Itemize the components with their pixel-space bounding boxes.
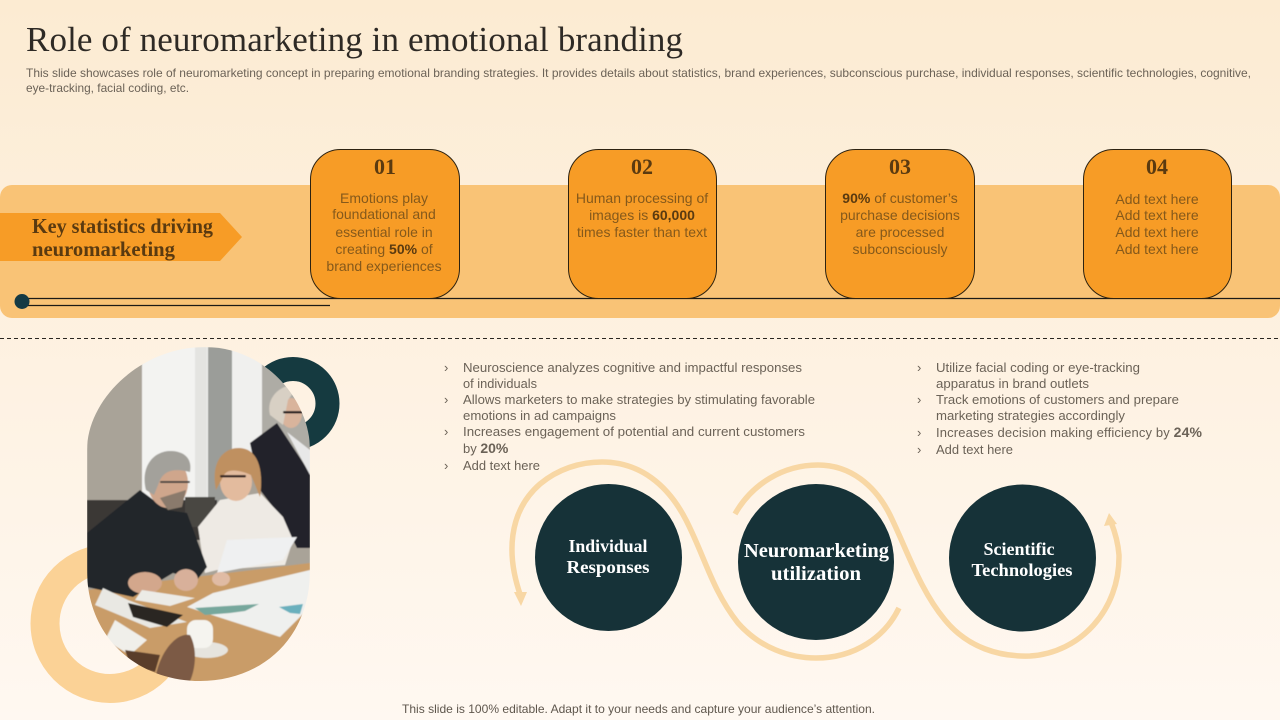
bullet list: scientific technologies: Add text here — [936, 442, 1013, 457]
bullet list: individual responses: › — [444, 360, 448, 375]
bullet list: scientific technologies: Increases decision making efficiency by 24% — [936, 424, 1203, 440]
bullet list: individual responses: emotions in ad campaigns — [463, 408, 617, 423]
timeline lines — [14, 294, 1280, 309]
card 01 — [310, 150, 460, 298]
bullet list: individual responses: › — [444, 458, 448, 473]
bullet list: individual responses: › — [444, 392, 448, 407]
decorative ring: dark — [258, 369, 328, 438]
card 02: 02 — [631, 154, 653, 179]
card 01: 01 — [374, 154, 396, 179]
bullet list: scientific technologies: › — [917, 442, 921, 457]
bullet list: scientific technologies: Track emotions of customers and prepare — [936, 392, 1179, 407]
card 01: creating 50% of — [335, 241, 433, 257]
card 04 — [1084, 150, 1232, 298]
node: Individual Responses: Responses — [566, 557, 650, 577]
bullet list: individual responses: by 20% — [463, 440, 509, 456]
heading arrow: key statistics: Key statistics driving — [32, 214, 213, 238]
description text: eye-tracking, facial coding, etc. — [26, 81, 189, 95]
panel: key statistics band — [0, 150, 1280, 318]
node: Neuromarketing utilization — [738, 484, 894, 640]
card 03: 03 — [889, 154, 911, 179]
bullet list: individual responses — [444, 360, 815, 473]
card 04: Add text here — [1115, 224, 1199, 240]
card 02: images is 60,000 — [589, 207, 695, 223]
bullet list: scientific technologies: › — [917, 360, 921, 375]
node: Neuromarketing utilization: Neuromarketing — [744, 540, 889, 562]
title: Role of neuromarketing in emotional branding — [26, 20, 683, 59]
card 01: foundational and — [332, 206, 436, 222]
bullet list: individual responses: Neuroscience analyzes cognitive and impactful responses — [463, 360, 802, 375]
decorative ring: light orange — [45, 558, 175, 688]
card 03: 90% of customer’s — [842, 190, 958, 206]
card 03: are processed — [856, 224, 944, 240]
bullet list: scientific technologies: › — [917, 392, 921, 407]
card 01: brand experiences — [326, 258, 442, 274]
node: Scientific Technologies — [949, 484, 1096, 632]
node: Individual Responses: Individual — [568, 536, 648, 556]
card 04: Add text here — [1115, 207, 1199, 223]
flow arrow: first wave — [512, 462, 899, 658]
node: Scientific Technologies: Scientific — [984, 539, 1055, 559]
heading arrow: key statistics: neuromarketing — [32, 237, 175, 261]
footer note: This slide is 100% editable. Adapt it to your needs and capture your audience’s attention. — [402, 702, 875, 716]
card 04: Add text here — [1115, 191, 1199, 207]
photo: team meeting — [87, 347, 310, 690]
flow arrow: second wave — [735, 465, 1119, 656]
heading arrow: key statistics — [0, 213, 242, 261]
card 01: essential role in — [335, 224, 433, 240]
description text: This slide showcases role of neuromarketing concept in preparing emotional branding strategies. It provides details about statistics, brand experiences, subconscious purchase, individual responses, scientific technologies, cognitive, — [26, 66, 1251, 80]
card 04: 04 — [1146, 154, 1168, 179]
bullet list: scientific technologies: marketing strategies accordingly — [936, 408, 1126, 423]
bullet list: individual responses: Increases engagement of potential and current customers — [463, 424, 806, 439]
bullet list: individual responses: Allows marketers to make strategies by stimulating favorable — [463, 392, 815, 407]
card 04: Add text here — [1115, 241, 1199, 257]
bullet list: scientific technologies: apparatus in brand outlets — [936, 376, 1090, 391]
bullet list: individual responses: › — [444, 424, 448, 439]
card 02: Human processing of — [576, 190, 708, 206]
description text — [26, 66, 1251, 95]
bullet list: individual responses: Add text here — [463, 458, 540, 473]
card 02: times faster than text — [577, 224, 707, 240]
bullet list: individual responses: of individuals — [463, 376, 537, 391]
card 03 — [826, 150, 974, 298]
bullet list: scientific technologies: Utilize facial coding or eye-tracking — [936, 360, 1140, 375]
node: Individual Responses — [535, 484, 682, 631]
bullet list: scientific technologies — [917, 360, 1203, 457]
card 03: purchase decisions — [840, 207, 960, 223]
card 01: Emotions play — [340, 190, 428, 206]
bullet list: scientific technologies: › — [917, 425, 921, 440]
node: Neuromarketing utilization: utilization — [771, 563, 861, 585]
card 03: subconsciously — [853, 241, 947, 257]
node: Scientific Technologies: Technologies — [972, 560, 1072, 580]
card 02 — [568, 150, 716, 298]
